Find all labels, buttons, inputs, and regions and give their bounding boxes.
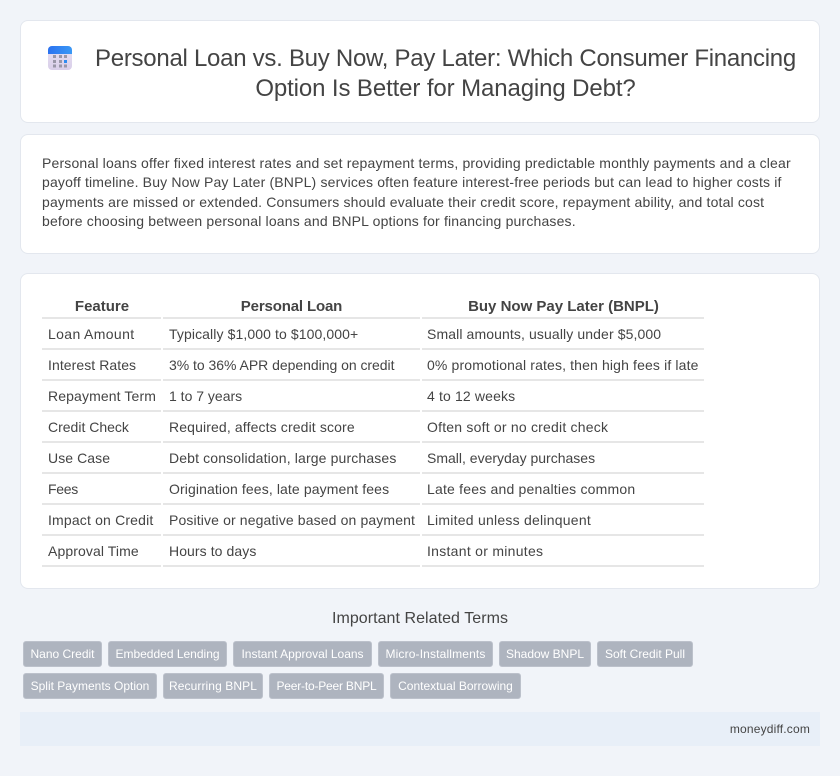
tag xyxy=(390,673,521,699)
text block: introduction xyxy=(42,155,791,229)
tag xyxy=(378,641,493,667)
tag: Shadow BNPL xyxy=(506,647,584,661)
tag: Embedded Lending xyxy=(115,647,220,661)
heading: related terms: Important Related Terms xyxy=(332,610,508,627)
row: loan amount: Typically $1,000 to $100,000+ xyxy=(169,326,358,342)
footer bar xyxy=(20,712,820,746)
row: approval time: Approval Time xyxy=(48,543,139,559)
row: loan amount: Loan Amount xyxy=(48,326,134,342)
tag: Nano Credit xyxy=(30,647,95,661)
text block: introduction: Personal loans offer fixed interest rates and set repayment terms, providing predictable monthly payments and a clear xyxy=(42,155,791,171)
row: interest rates: Interest Rates xyxy=(48,357,136,373)
comparison table xyxy=(42,298,704,567)
tag: Recurring BNPL xyxy=(169,679,257,693)
row: interest rates: 0% promotional rates, then high fees if late xyxy=(427,357,699,373)
text block: introduction: payoff timeline. Buy Now Pay Later (BNPL) services often feature interest-free periods but can lead to higher costs if xyxy=(42,174,782,190)
tag: Instant Approval Loans xyxy=(241,647,364,661)
tag: Contextual Borrowing xyxy=(398,679,513,693)
table header xyxy=(75,298,659,315)
row: loan amount xyxy=(48,326,661,342)
row: repayment term: 1 to 7 years xyxy=(169,388,242,404)
text block: introduction: payments are missed or extended. Consumers should evaluate their credit score, repayment ability, and total cost xyxy=(42,194,764,210)
row: credit check: Often soft or no credit check xyxy=(427,419,608,435)
title: Personal Loan vs. Buy Now, Pay Later: Which Consumer Financing xyxy=(95,45,796,72)
panel: introduction xyxy=(20,134,820,254)
title: Option Is Better for Managing Debt? xyxy=(255,75,636,102)
tag xyxy=(23,641,102,667)
tag group: related terms xyxy=(23,641,693,699)
row: credit check: Credit Check xyxy=(48,419,129,435)
tag xyxy=(108,641,227,667)
tag xyxy=(23,673,157,699)
panel: title card xyxy=(20,20,820,123)
row: approval time xyxy=(48,543,543,559)
tag xyxy=(163,673,263,699)
row: credit check: Required, affects credit score xyxy=(169,419,355,435)
tag: Peer-to-Peer BNPL xyxy=(276,679,376,693)
tag xyxy=(499,641,591,667)
row: approval time: Hours to days xyxy=(169,543,256,559)
row: fees: Late fees and penalties common xyxy=(427,481,635,497)
tag: Soft Credit Pull xyxy=(605,647,685,661)
table header: Buy Now Pay Later (BNPL) xyxy=(468,298,659,315)
row: repayment term: 4 to 12 weeks xyxy=(427,388,515,404)
row: use case: Use Case xyxy=(48,450,110,466)
row: loan amount: Small amounts, usually under $5,000 xyxy=(427,326,661,342)
row: impact on credit: Impact on Credit xyxy=(48,512,153,528)
row: impact on credit: Limited unless delinquent xyxy=(427,512,591,528)
tag: Split Payments Option xyxy=(31,679,149,693)
row: approval time: Instant or minutes xyxy=(427,543,543,559)
row: interest rates xyxy=(48,357,699,373)
tag xyxy=(269,673,384,699)
row: use case: Debt consolidation, large purchases xyxy=(169,450,396,466)
row: impact on credit xyxy=(48,512,591,528)
row: use case xyxy=(48,450,595,466)
row: fees xyxy=(48,481,635,497)
row: fees: Fees xyxy=(48,481,78,497)
footer: source: moneydiff.com xyxy=(730,722,810,736)
row: impact on credit: Positive or negative based on payment xyxy=(169,512,415,528)
title xyxy=(95,45,796,102)
row: repayment term xyxy=(48,388,515,404)
text block: introduction: before choosing between personal loans and BNPL options for financing purchases. xyxy=(42,213,576,229)
table header: Personal Loan xyxy=(241,298,342,315)
row: credit check xyxy=(48,419,608,435)
icon: calendar xyxy=(48,46,72,70)
panel: comparison table xyxy=(20,273,820,589)
row: use case: Small, everyday purchases xyxy=(427,450,595,466)
row: interest rates: 3% to 36% APR depending on credit xyxy=(169,357,394,373)
tag: Micro-Installments xyxy=(385,647,486,661)
tag xyxy=(233,641,372,667)
tag xyxy=(597,641,693,667)
table header: Feature xyxy=(75,298,129,315)
row: repayment term: Repayment Term xyxy=(48,388,156,404)
row: fees: Origination fees, late payment fees xyxy=(169,481,389,497)
